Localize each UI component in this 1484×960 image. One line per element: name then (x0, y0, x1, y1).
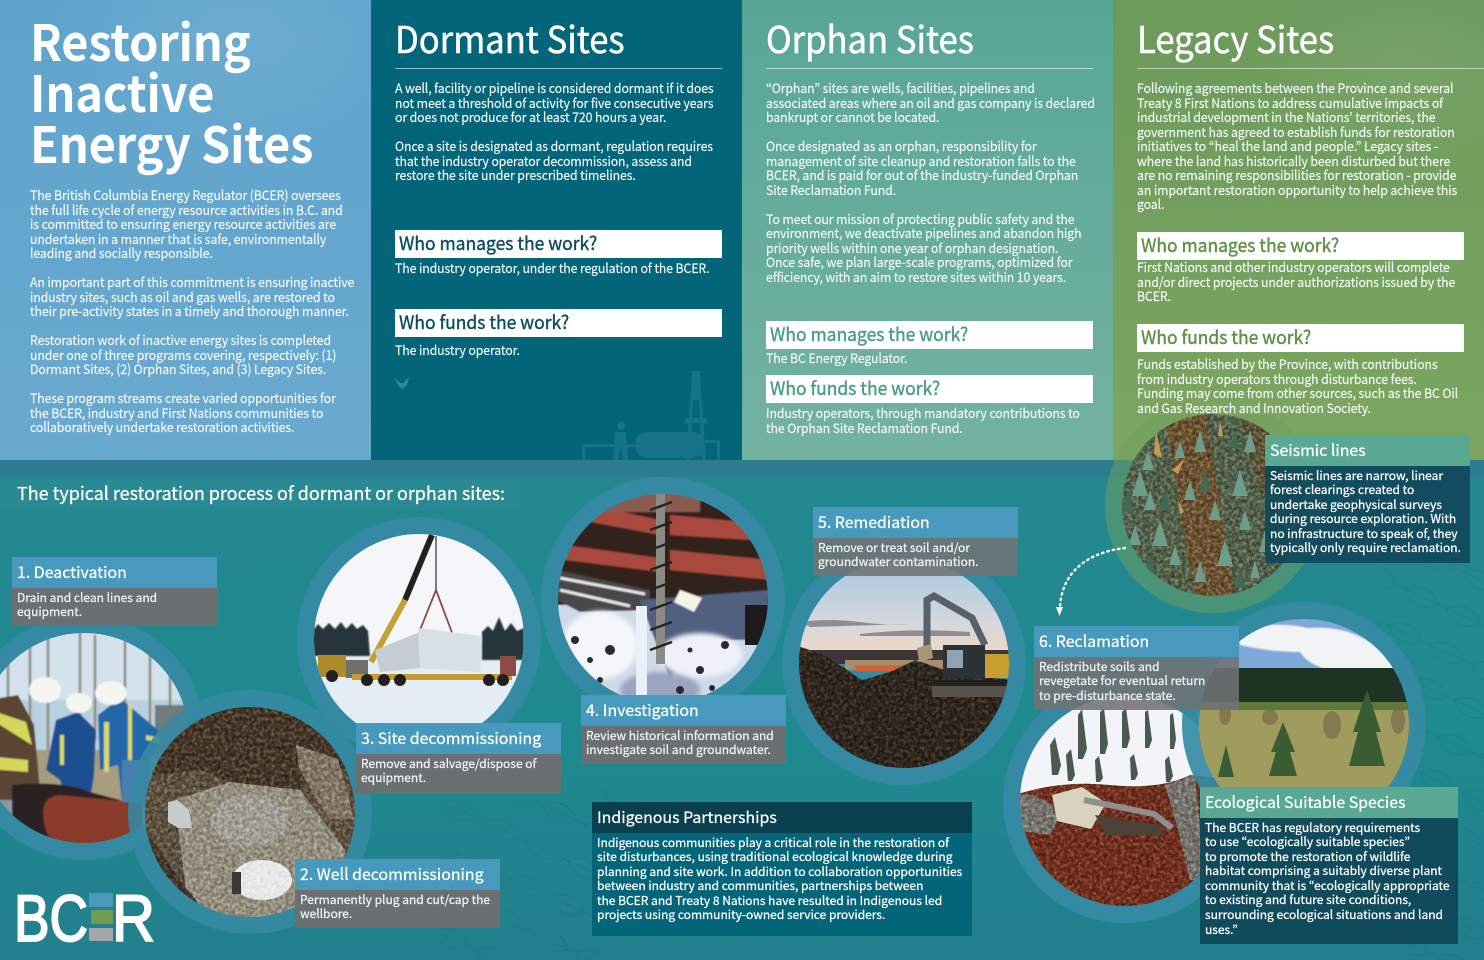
main title: Energy Sites (30, 106, 313, 178)
main title: Restoring (30, 4, 251, 76)
orphan description: bankrupt or cannot be located. (766, 107, 939, 126)
intro text: The British Columbia Energy Regulator (BCER) oversees (30, 185, 341, 204)
step 6 label: revegetate for eventual return (1039, 672, 1205, 689)
orphan description: efficiency, with an aim to restore sites within 10 years. (766, 266, 1066, 286)
seismic lines callout: forest clearings created to (1270, 481, 1414, 498)
photo 8: seismic line forest (1105, 414, 1304, 613)
intro text: the BCER, industry and First Nations communities to (30, 402, 323, 422)
who funds answer: Industry operators, through mandatory contributions to (766, 403, 1080, 422)
step 6 label: 6. Reclamation (1039, 629, 1149, 652)
indigenous partnerships callout: projects using community-owned service providers. (597, 906, 885, 923)
step 4 label (581, 695, 786, 764)
step 4 label: 4. Investigation (586, 698, 699, 721)
photo 7: reclaimed meadow (1182, 602, 1426, 788)
seismic lines callout (1265, 435, 1470, 563)
who funds answer: and Gas Research and Innovation Society. (1137, 398, 1371, 416)
logo: BCER: BC (14, 881, 88, 955)
orphan description: associated areas where an oil and gas company is declared (766, 92, 1095, 112)
intro text: leading and socially responsible. (30, 243, 213, 262)
dormant description: Once a site is designated as dormant, regulation requires (395, 136, 713, 155)
seismic lines callout: Seismic lines are narrow, linear (1270, 466, 1443, 484)
seismic lines callout: undertake geophysical surveys (1270, 496, 1442, 513)
ecological suitable species callout: Ecological Suitable Species (1205, 790, 1406, 813)
orphan description: “Orphan” sites are wells, facilities, pipelines and (766, 78, 1035, 97)
intro text: These program streams create varied opportunities for (30, 388, 336, 407)
ecological suitable species callout: to use “ecologically suitable species” (1205, 833, 1410, 850)
indigenous partnerships callout: between industry and communities, partnerships between (597, 877, 923, 894)
who funds answer: from industry operators through disturbance fees. (1137, 368, 1417, 388)
ecological suitable species callout: habitat comprising a suitably diverse plant (1205, 862, 1442, 879)
dormant description: restore the site under prescribed timelines. (395, 165, 636, 184)
orphan description: Once safe, we plan large-scale programs, optimized for (766, 252, 1072, 271)
indigenous partnerships callout: the BCER and Treaty 8 Nations have resulted in Indigenous led (597, 892, 942, 909)
heading: Dormant Sites (395, 10, 625, 64)
legacy description: initiatives to “heal the land and people.” Legacy sites - (1137, 136, 1438, 155)
intro text: Restoration work of inactive energy sites is completed (30, 330, 331, 349)
photo 3: crane lifting equipment (297, 517, 541, 761)
photo 5: excavator on soil (782, 541, 1026, 785)
step 5 label: 5. Remediation (818, 510, 930, 533)
orphan description: priority wells within one year of orphan designation. (766, 238, 1058, 256)
dormant description: A well, facility or pipeline is considered dormant if it does (395, 78, 714, 97)
intro text: An important part of this commitment is ensuring inactive (30, 272, 354, 291)
legacy description: industrial development in the Nations’ territories, the (1137, 107, 1435, 126)
step 6 label: to pre-disturbance state. (1039, 687, 1176, 704)
legacy description: government has agreed to establish funds for restoration (1137, 122, 1455, 140)
orphan description: environment, we deactivate pipelines and abandon high (766, 223, 1081, 242)
intro text: industry sites, such as oil and gas wells, are restored to (30, 286, 335, 306)
panel: orphan sites (742, 0, 1113, 460)
orphan description: To meet our mission of protecting public safety and the (766, 208, 1074, 228)
who manages box: Who manages the work? (1141, 232, 1339, 258)
step 1 label: equipment. (17, 603, 82, 620)
photo 6: excavator in snow (1003, 696, 1220, 923)
seismic lines callout: typically only require reclamation. (1270, 539, 1461, 556)
legacy description: Following agreements between the Province and several (1137, 78, 1453, 97)
dormant description (395, 78, 714, 184)
seismic lines callout: Seismic lines (1270, 438, 1366, 461)
orphan description: BCER, and is paid for out of the industry-funded Orphan (766, 165, 1078, 184)
who manages answer: The BC Energy Regulator. (766, 348, 907, 367)
who funds box (1137, 324, 1464, 352)
orphan description: Site Reclamation Fund. (766, 180, 896, 198)
ecological suitable species callout: The BCER has regulatory requirements (1205, 818, 1420, 836)
step 3 label: equipment. (361, 769, 426, 786)
ecological suitable species callout: surrounding ecological situations and land (1205, 906, 1443, 923)
intro text: is committed to ensuring energy resource activities are (30, 214, 336, 233)
step 2 label: wellbore. (300, 905, 352, 922)
intro text: their pre-activity states in a timely and thorough manner. (30, 301, 349, 320)
who manages answer (1137, 257, 1455, 305)
who manages answer: and/or direct projects under authorizations issued by the (1137, 272, 1455, 290)
ecological suitable species callout (1200, 787, 1458, 944)
step 5 label (813, 507, 1018, 576)
photo 2: well excavation (128, 690, 372, 934)
dormant description: that the industry operator decommission, assess and (395, 150, 692, 170)
step 2 label (295, 859, 500, 928)
who manages answer: BCER. (1137, 286, 1171, 305)
intro text: Dormant Sites, (2) Orphan Sites, and (3) Legacy Sites. (30, 359, 326, 378)
indigenous partnerships callout: Indigenous communities play a critical role in the restoration of (597, 834, 949, 850)
who manages box: Who manages the work? (399, 230, 597, 256)
legacy description (1137, 78, 1457, 213)
ecological suitable species callout: to existing and future site conditions, (1205, 891, 1411, 908)
ecological suitable species callout: uses.” (1205, 921, 1238, 938)
step 6 label: Redistribute soils and (1039, 658, 1160, 674)
legacy description: Treaty 8 First Nations to address cumulative impacts of (1137, 92, 1443, 112)
who funds answer: the Orphan Site Reclamation Fund. (766, 418, 963, 436)
intro text: undertaken in a manner that is safe, environmentally (30, 228, 326, 248)
step 4 label: investigate soil and groundwater. (586, 741, 771, 758)
intro text (30, 185, 354, 436)
who funds box (766, 375, 1093, 402)
icon: bird (394, 377, 409, 389)
indigenous partnerships callout: site disturbances, using traditional ecological knowledge during (597, 848, 952, 865)
legacy description: goal. (1137, 194, 1164, 213)
intro text: under one of three programs covering, respectively: (1) (30, 344, 336, 364)
who manages box (766, 321, 1093, 348)
step 1 label: Drain and clean lines and (17, 588, 157, 606)
indigenous partnerships callout (592, 802, 972, 936)
intro text: the full life cycle of energy resource activities in B.C. and (30, 200, 343, 218)
who funds answer: Funding may come from other sources, such as the BC Oil (1137, 383, 1458, 402)
who funds answer: The industry operator. (395, 340, 520, 359)
step 4 label: Review historical information and (586, 726, 774, 744)
step 1 label (12, 557, 217, 626)
indigenous partnerships callout: planning and site work. In addition to collaboration opportunities (597, 863, 962, 880)
who funds box: Who funds the work? (770, 375, 940, 401)
step 5 label: Remove or treat soil and/or (818, 538, 970, 556)
orphan description (766, 78, 1095, 286)
dormant description: or does not produce for at least 720 hours a year. (395, 107, 666, 126)
who manages box (1137, 232, 1464, 260)
main title (30, 4, 313, 178)
arrow: dotted connector from seismic lines to reclamation (1056, 548, 1125, 616)
step 2 label: 2. Well decommissioning (300, 862, 484, 885)
who funds answer (766, 403, 1080, 436)
who manages answer: First Nations and other industry operators will complete (1137, 257, 1450, 276)
ecological suitable species callout: to promote the restoration of wildlife (1205, 848, 1410, 865)
panel: dormant sites (371, 0, 742, 460)
step 1 label: 1. Deactivation (17, 560, 127, 583)
orphan description: management of site cleanup and restoration falls to the (766, 150, 1076, 170)
heading: Orphan Sites (766, 10, 974, 64)
step 3 label (356, 723, 561, 793)
legacy description: are no remaining responsibilities for restoration - provide (1137, 165, 1456, 184)
who manages box (395, 230, 722, 258)
intro text: collaboratively undertake restoration activities. (30, 417, 294, 436)
orphan description: Once designated as an orphan, responsibility for (766, 136, 1037, 155)
who funds answer: Funds established by the Province, with contributions (1137, 354, 1437, 373)
photo 1: workers at pipe (0, 616, 206, 860)
panel: intro (0, 0, 371, 460)
step 6 label (1034, 626, 1239, 710)
dormant description: not meet a threshold of activity for five consecutive years (395, 92, 713, 112)
photo 4: auger drilling (541, 477, 785, 695)
step 2 label: Permanently plug and cut/cap the (300, 890, 490, 908)
icon: oil rig silhouette (582, 371, 720, 460)
legacy description: where the land has historically been disturbed but there (1137, 150, 1450, 170)
who funds box (395, 309, 722, 336)
photo circles (0, 414, 1426, 942)
seismic lines callout: no infrastructure to speak of, they (1270, 525, 1458, 542)
logo: BCER (14, 881, 155, 955)
main title: Inactive (30, 55, 214, 127)
who funds box: Who funds the work? (399, 309, 569, 335)
who manages box: Who manages the work? (770, 321, 968, 347)
heading: Legacy Sites (1137, 10, 1334, 64)
step 5 label: groundwater contamination. (818, 553, 978, 570)
who funds box: Who funds the work? (1141, 324, 1311, 350)
panel: legacy sites (1113, 0, 1484, 460)
step 3 label: Remove and salvage/dispose of (361, 754, 536, 772)
who funds answer (1137, 354, 1458, 416)
step 3 label: 3. Site decommissioning (361, 726, 541, 749)
legacy description: an important restoration opportunity to help achieve this (1137, 180, 1457, 198)
logo: BCER: R (112, 881, 155, 955)
who manages answer: The industry operator, under the regulation of the BCER. (395, 258, 709, 277)
process title: The typical restoration process of dormant or orphan sites: (17, 480, 505, 506)
ecological suitable species callout: community that is “ecologically appropriate (1205, 877, 1450, 894)
seismic lines callout: during resource exploration. With (1270, 510, 1456, 527)
indigenous partnerships callout: Indigenous Partnerships (597, 805, 777, 828)
